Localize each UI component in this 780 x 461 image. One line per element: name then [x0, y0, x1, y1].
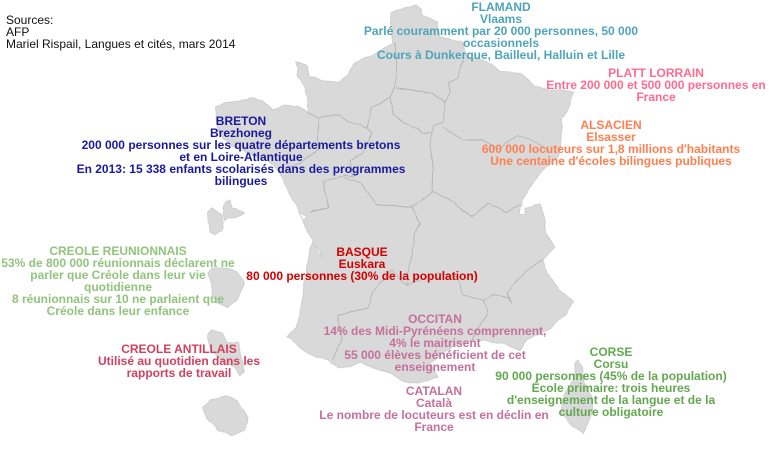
label: Catalan: Català: [416, 396, 452, 410]
label: Occitan: [324, 312, 546, 374]
sources: [6, 13, 236, 51]
sources: Mariel Rispail, Langues et cités, mars 2014: [6, 37, 235, 51]
label: Corse: 90 000 personnes (45% de la population): [495, 369, 727, 383]
label: Occitan: 4% le maitrisent: [389, 336, 481, 350]
label: Créole réunionnais: 53% de 800 000 réunionnais déclarent ne: [1, 256, 235, 270]
label: Breton: bilingues: [215, 174, 267, 188]
label: Créole réunionnais: 8 réunionnais sur 10 ne parlaient que: [12, 292, 224, 306]
sources: Sources:: [6, 13, 53, 27]
label: Alsacien: ALSACIEN: [580, 118, 642, 132]
label: Créole antillais: CREOLE ANTILLAIS: [121, 342, 237, 356]
sources: AFP: [6, 25, 29, 39]
label: Corse: École primaire: trois heures: [532, 381, 690, 395]
label: Basque: [246, 245, 478, 283]
overseas: Martinique: [207, 330, 245, 375]
label: Corse: [495, 345, 727, 419]
label: Alsacien: [482, 118, 740, 168]
label: Basque: 80 000 personnes (30% de la population): [246, 269, 478, 283]
label: Alsacien: Elsasser: [586, 130, 636, 144]
label: Catalan: France: [414, 420, 454, 434]
label: Corse: CORSE: [590, 345, 632, 359]
region borders: [286, 42, 547, 360]
label: Platt lorrain: Entre 200 000 et 500 000 personnes en: [546, 78, 766, 92]
label: Breton: Brezhoneg: [210, 126, 272, 140]
metropolitan France: [215, 5, 573, 383]
label: Corse: culture obligatoire: [559, 405, 663, 419]
label: Créole antillais: rapports de travail: [127, 366, 231, 380]
label: Créole réunionnais: quotidienne: [84, 280, 152, 294]
label: Créole antillais: [98, 342, 260, 380]
label: Corse: d'enseignement de la langue et de la: [507, 393, 715, 407]
label: Flamand: Parlé couramment par 20 000 personnes, 50 000: [364, 24, 638, 38]
label: Flamand: [364, 0, 638, 62]
label: Flamand: occasionnels: [463, 36, 539, 50]
overseas: Guyane: [208, 268, 245, 307]
label: Platt lorrain: [546, 66, 766, 104]
label: Catalan: CATALAN: [406, 384, 462, 398]
label: Breton: et en Loire-Atlantique: [179, 150, 303, 164]
label: Breton: En 2013: 15 338 enfants scolarisés dans des programmes: [77, 162, 405, 176]
label: Occitan: 14% des Midi-Pyrénéens comprennent,: [324, 324, 546, 338]
label: Occitan: OCCITAN: [408, 312, 462, 326]
label: Basque: BASQUE: [336, 245, 388, 259]
overseas: La Réunion: [203, 396, 248, 435]
label: Catalan: [319, 384, 549, 434]
label: Flamand: FLAMAND: [471, 0, 531, 14]
label: Platt lorrain: France: [636, 90, 676, 104]
label: Occitan: enseignement: [395, 360, 475, 374]
label: Flamand: Vlaams: [480, 12, 522, 26]
label: Catalan: Le nombre de locuteurs est en déclin en: [319, 408, 549, 422]
label: Breton: [77, 114, 405, 188]
label: Créole réunionnais: CREOLE REUNIONNAIS: [49, 244, 187, 258]
label: Créole réunionnais: [1, 244, 235, 318]
overseas: Guadeloupe: [207, 200, 245, 235]
label: Créole réunionnais: Créole dans leur enfance: [47, 304, 189, 318]
label: Breton: BRETON: [216, 114, 266, 128]
label: Flamand: Cours à Dunkerque, Bailleul, Halluin et Lille: [377, 48, 625, 62]
label: Alsacien: 600 000 locuteurs sur 1,8 millions d'habitants: [482, 142, 740, 156]
label: Alsacien: Une centaine d'écoles bilingues publiques: [490, 154, 732, 168]
label: Occitan: 55 000 élèves bénéficient de cet: [344, 348, 526, 362]
label: Créole antillais: Utilisé au quotidien dans les: [98, 354, 260, 368]
label: Créole réunionnais: parler que Créole dans leur vie: [30, 268, 206, 282]
coastal inlets: [299, 212, 323, 258]
label: Corse: Corsu: [594, 357, 628, 371]
Corsica: [560, 360, 592, 433]
label: Platt lorrain: PLATT LORRAIN: [608, 66, 704, 80]
label: Basque: Euskara: [339, 257, 385, 271]
label: Breton: 200 000 personnes sur les quatre départements bretons: [82, 138, 400, 152]
